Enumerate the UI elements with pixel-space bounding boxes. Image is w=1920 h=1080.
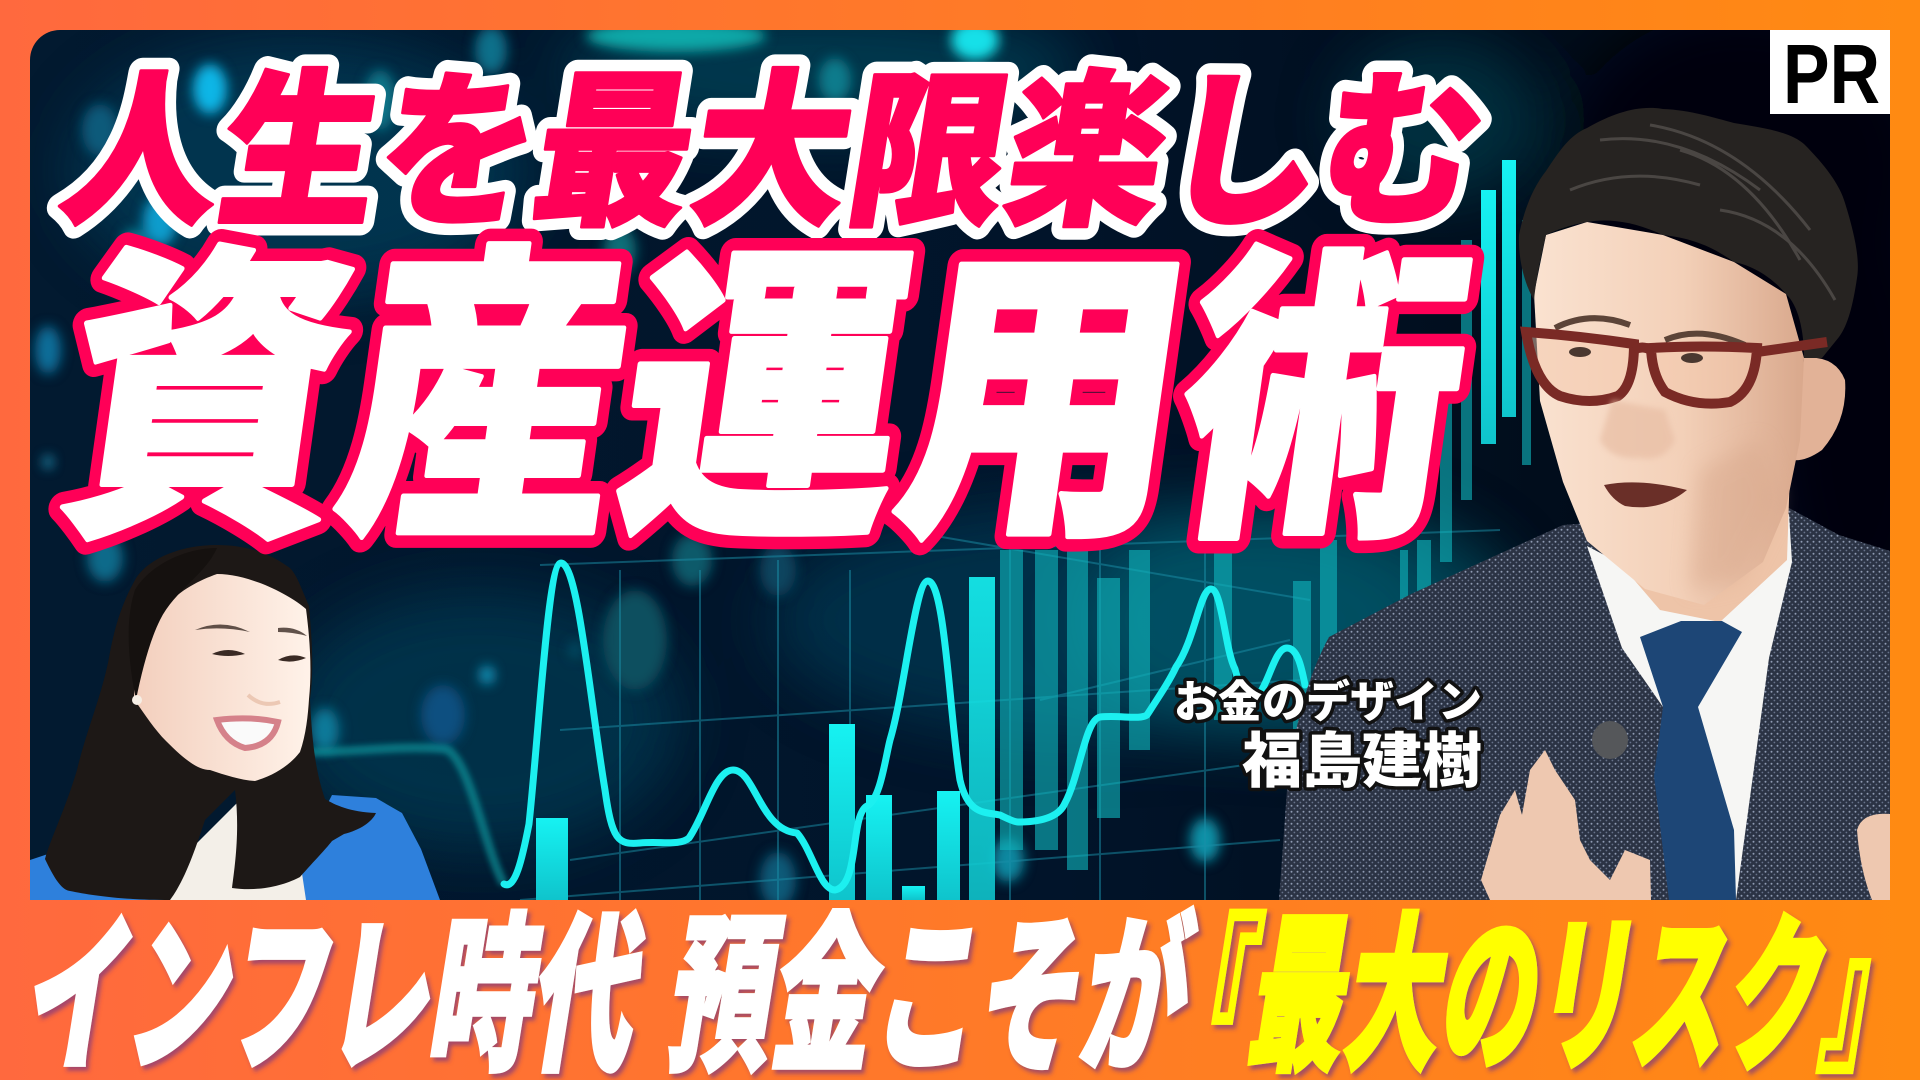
man nose <box>1600 400 1675 459</box>
dim bars <box>1000 220 1531 870</box>
title line 1 <box>48 16 1502 260</box>
man right hand <box>1857 814 1890 900</box>
bright bars <box>536 160 1516 900</box>
chart grid lines <box>520 530 1500 900</box>
man hair highlights <box>1570 125 1835 300</box>
man neck <box>1634 491 1790 621</box>
man eyes <box>1569 347 1703 363</box>
woman earring <box>132 695 142 705</box>
woman blouse <box>170 800 306 900</box>
man glasses <box>1526 332 1827 404</box>
panel background <box>30 30 1890 900</box>
speaker: 福島建樹 <box>1242 713 1482 800</box>
man microphone <box>1592 721 1628 759</box>
woman hair strand <box>129 550 210 696</box>
woman <box>30 545 440 900</box>
man shirt <box>1587 514 1792 900</box>
PR text: PR <box>1783 27 1880 121</box>
title line 2 outline: 資産運用術 <box>39 150 1497 599</box>
man suit <box>1279 508 1890 900</box>
man <box>1279 108 1890 900</box>
man left hand <box>1481 750 1651 900</box>
candlestick bars <box>536 160 1531 900</box>
man ear <box>1792 358 1845 460</box>
background glow <box>70 10 1920 850</box>
PR box <box>1770 30 1890 114</box>
man mouth <box>1604 482 1687 507</box>
woman hair back <box>45 545 376 900</box>
faint line start <box>306 748 504 884</box>
speaker name <box>1174 666 1482 800</box>
man hair <box>1519 108 1858 358</box>
line chart <box>504 563 1305 890</box>
man face shading <box>1690 440 1780 590</box>
title line 1 outline: 人生を最大限楽しむ <box>48 16 1502 260</box>
woman brows and eyes <box>195 624 307 662</box>
man face <box>1534 222 1804 605</box>
woman mouth <box>217 718 278 748</box>
woman nose shadow <box>248 695 280 704</box>
PR badge <box>1770 27 1890 121</box>
organisation: お金のデザイン <box>1174 666 1482 730</box>
title line 2 <box>39 150 1497 599</box>
man eyebrows <box>1555 318 1745 345</box>
title line 2 fill: 資産運用術 <box>39 150 1497 599</box>
man tie <box>1640 621 1742 900</box>
bottom headline <box>12 860 1920 1080</box>
bokeh lights <box>35 20 1220 908</box>
title line 1 fill: 人生を最大限楽しむ <box>48 16 1502 260</box>
woman face <box>134 574 310 781</box>
woman jacket <box>30 795 440 900</box>
